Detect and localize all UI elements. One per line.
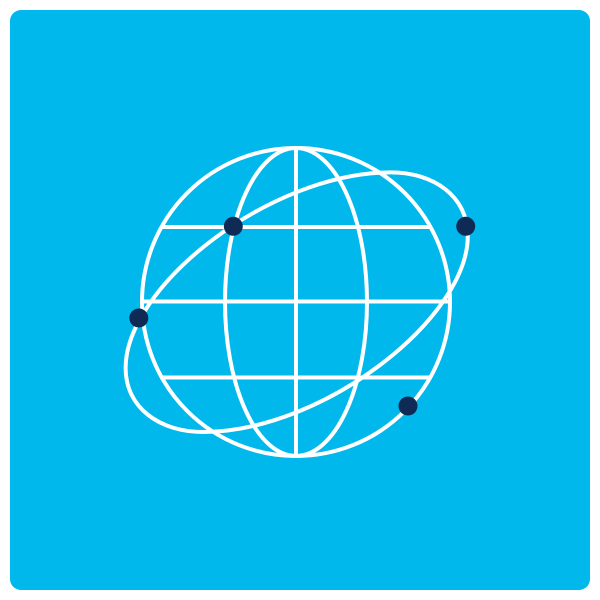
- equator line: [142, 300, 450, 304]
- dot: lower right: [398, 396, 418, 416]
- dot: upper left: [224, 217, 243, 236]
- orbit ring: [126, 172, 468, 432]
- upper latitude line: [161, 225, 431, 229]
- globe outline: [142, 148, 450, 456]
- lower latitude line: [161, 376, 431, 380]
- dot: upper right: [456, 217, 475, 236]
- icon: globe grid: [142, 148, 450, 456]
- central meridian: [294, 148, 298, 456]
- satellite dots: [129, 217, 475, 416]
- dot: left: [129, 308, 148, 328]
- inner meridian ellipse: [225, 148, 367, 456]
